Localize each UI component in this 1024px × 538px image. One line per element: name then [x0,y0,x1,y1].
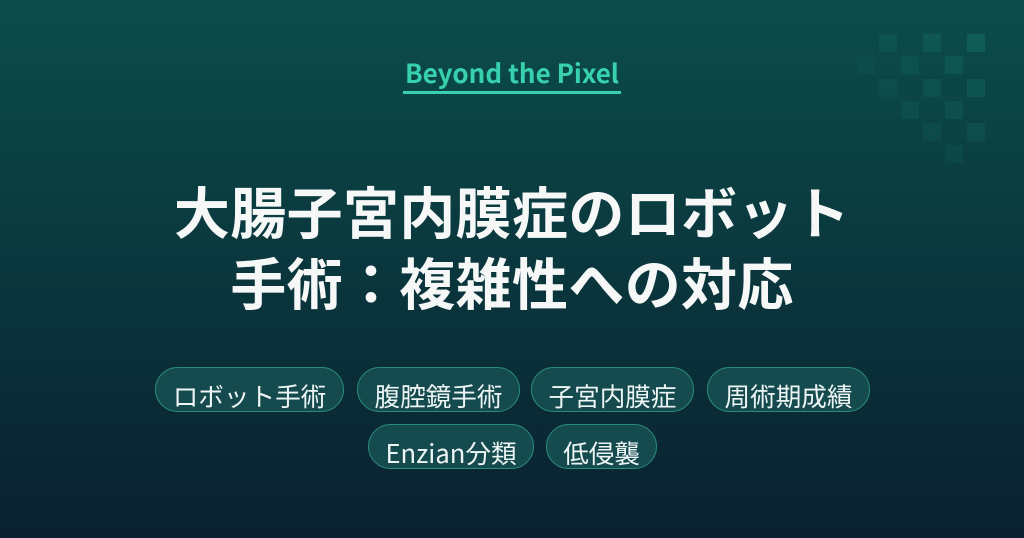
decorative square pattern [879,34,985,141]
title [174,170,850,322]
tag: laparoscopic surgery [357,367,520,412]
tag list [155,367,870,469]
brand label: Beyond the Pixel [405,54,619,91]
tag: Enzian classification [368,424,534,469]
tag: robot surgery [155,367,344,412]
title: 手術：複雑性への対応 [230,241,794,322]
tag: minimally invasive [546,424,657,469]
title: 大腸子宮内膜症のロボット [174,170,850,251]
tag: perioperative outcomes [707,367,870,412]
tag: endometriosis [531,367,694,412]
